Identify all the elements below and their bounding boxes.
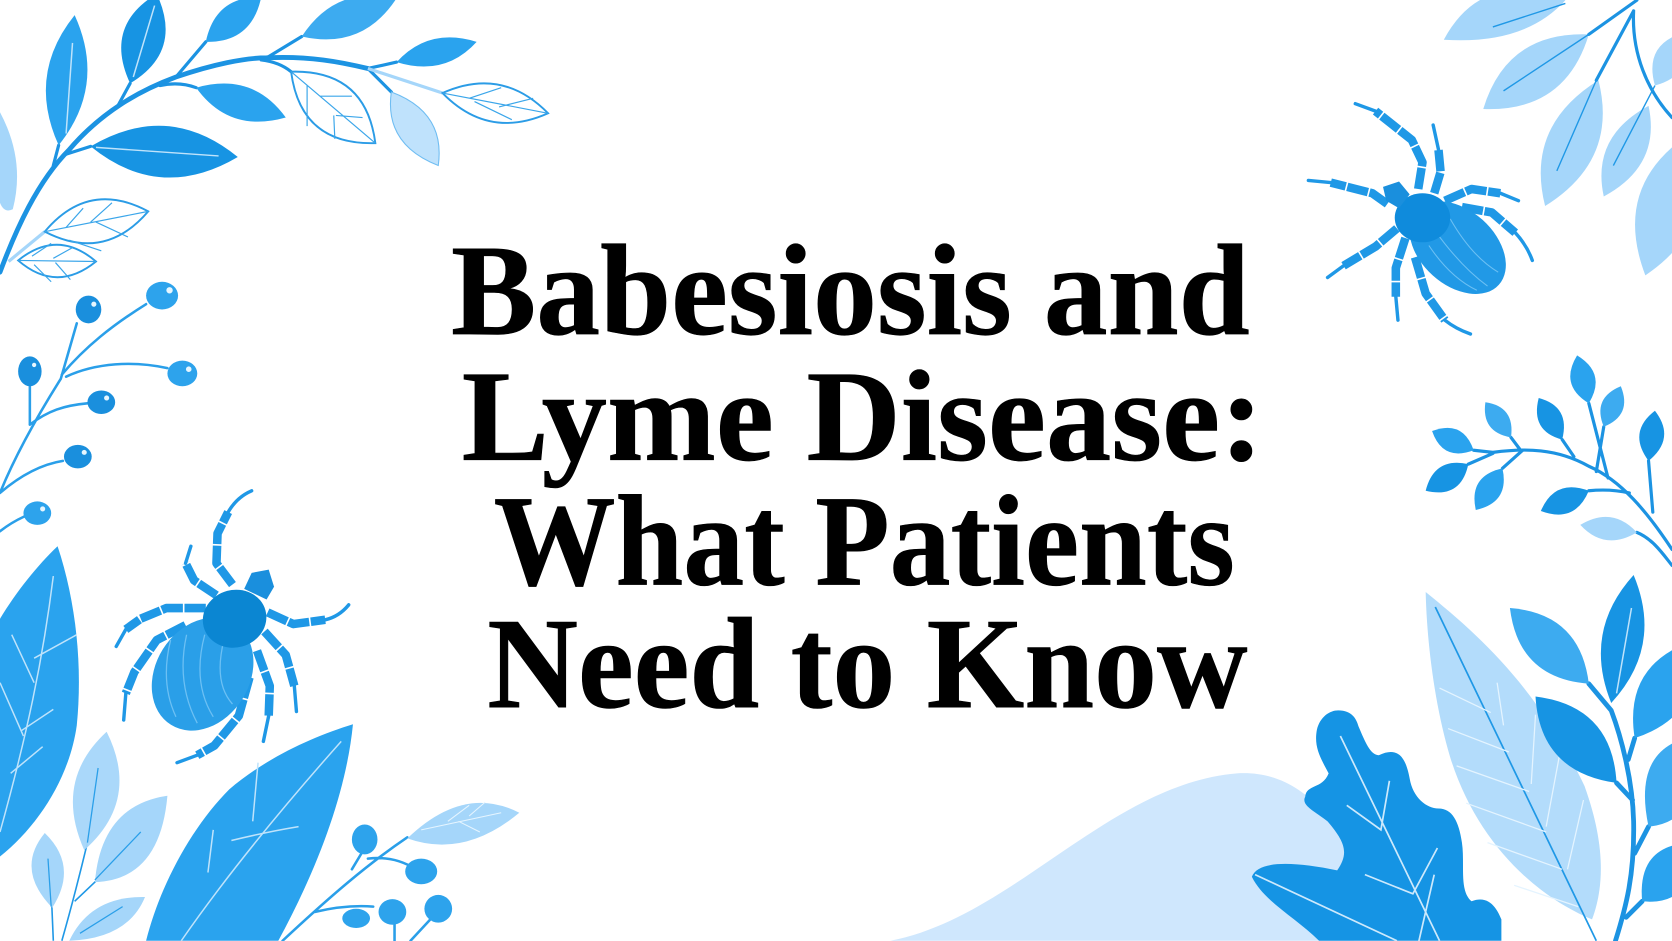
tick head <box>1383 182 1410 208</box>
tick abdomen <box>1391 183 1524 312</box>
title line 1: Babesiosis and <box>451 219 1250 363</box>
berry <box>424 895 452 923</box>
berry <box>18 356 42 386</box>
berry <box>167 361 197 386</box>
tick: upper-right <box>1308 104 1532 334</box>
pale leaf <box>390 92 439 166</box>
tick scutum <box>1395 193 1450 242</box>
tick legs <box>1308 104 1532 334</box>
title <box>451 219 1264 736</box>
large leaf: lower-left edge <box>0 546 79 857</box>
title line 2: Lyme Disease: <box>462 345 1264 489</box>
title line 4: Need to Know <box>487 592 1248 736</box>
berry sprig with pale leaf: bottom <box>283 802 519 941</box>
title line 3: What Patients <box>494 470 1235 614</box>
berry <box>405 859 437 884</box>
tick abdomen <box>131 599 274 750</box>
outline leaf <box>45 199 148 251</box>
outline leaf <box>443 83 548 123</box>
large leaf: bottom-left <box>146 724 353 941</box>
berry <box>76 296 101 323</box>
tick legs <box>116 491 349 763</box>
berry <box>64 445 92 468</box>
berry <box>342 909 370 928</box>
berry <box>352 825 377 854</box>
tick head <box>244 570 274 600</box>
berry <box>23 501 51 525</box>
berry sprig: left <box>0 282 197 531</box>
tick scutum <box>196 583 273 655</box>
outline leaf <box>18 243 96 282</box>
pale hill <box>890 773 1354 941</box>
leaf sprig: right <box>1426 355 1672 565</box>
berry <box>146 282 178 309</box>
pale sprig: bottom-left <box>32 732 167 941</box>
branch: top-left foliage <box>0 0 548 282</box>
leafy plant: bottom-right <box>1510 575 1672 941</box>
outline leaf <box>291 72 375 143</box>
pale branch: top-right <box>1444 0 1672 275</box>
tick: lower-left <box>116 491 349 763</box>
berry <box>87 391 115 414</box>
large pale leaf: bottom-right <box>1426 592 1601 941</box>
oak leaf: bottom-right <box>1252 710 1501 941</box>
berry <box>379 899 406 925</box>
